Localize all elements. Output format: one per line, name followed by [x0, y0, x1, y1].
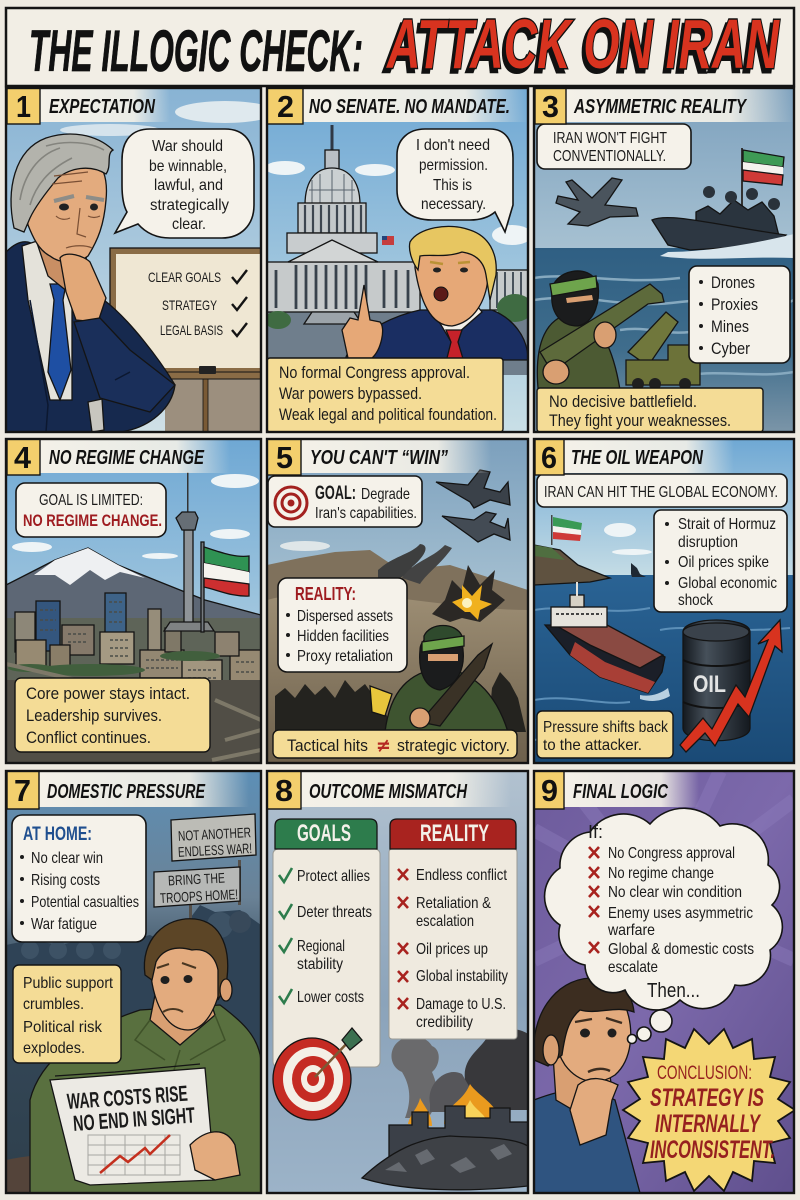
panel 9: final logic — [534, 771, 795, 1193]
header: asymmetric reality: ASYMMETRIC REALITY — [573, 96, 747, 118]
callout: oil risks list: Global economic — [678, 575, 777, 592]
thought cloud: Then... — [647, 980, 700, 1002]
caption: tactical hits: strategic victory. — [397, 736, 510, 755]
callout: oil risks list: shock — [678, 592, 714, 609]
mini chart — [88, 1135, 180, 1175]
callout: at home list: No clear win — [31, 850, 103, 867]
city — [6, 593, 261, 688]
callout: tactics list: Cyber — [711, 339, 750, 358]
boat with soldiers and flag — [652, 148, 794, 259]
callout: tactics list: Mines — [711, 317, 749, 336]
caption: public support crumbles: Public support — [23, 975, 113, 992]
panel 3: asymmetric reality — [534, 88, 794, 432]
callout: Iran won't fight conventionally: CONVENTIONALLY. — [553, 148, 666, 165]
thought cloud: No regime change — [608, 865, 714, 882]
callout: goal with target icon — [268, 476, 422, 527]
caption: no formal approval: No formal Congress approval. — [279, 363, 470, 382]
callout: reality list: Proxy retaliation — [297, 648, 393, 665]
panel 4: no regime change — [6, 439, 261, 763]
Iranian flag — [201, 542, 249, 632]
callout: goal with target icon: Iran's capabilities. — [315, 505, 417, 522]
fighter jets — [436, 470, 510, 542]
header: oil weapon — [535, 439, 734, 475]
panel 1: expectation — [6, 88, 275, 432]
thought cloud: No Congress approval — [608, 845, 735, 862]
thought cloud: No clear win condition — [608, 884, 742, 901]
header: domestic pressure: 7 — [14, 773, 31, 808]
figure: thoughtful man in suit — [6, 134, 175, 432]
smoke trails — [378, 544, 426, 578]
whiteboard: LEGAL BASIS — [160, 322, 223, 338]
callout: reality list: REALITY: — [295, 584, 356, 604]
terrain — [268, 550, 527, 610]
callout: at home list: AT HOME: — [23, 824, 92, 845]
panel 7: domestic pressure — [6, 771, 261, 1193]
header: expectation: 1 — [16, 89, 31, 124]
callout: at home list: Rising costs — [31, 872, 100, 889]
thought cloud: If: — [588, 822, 603, 842]
figure: worried man — [30, 919, 261, 1193]
header: domestic pressure — [7, 771, 249, 809]
goals column: stability — [297, 956, 343, 973]
speech bubble: permission. — [419, 157, 488, 174]
protest signs: NOT ANOTHER — [178, 824, 251, 844]
thought cloud — [545, 808, 782, 1010]
goals column: Regional — [297, 938, 345, 955]
reality column: credibility — [416, 1014, 473, 1031]
panel 8: outcome mismatch — [267, 771, 528, 1193]
speech bubble — [397, 129, 513, 232]
header: you can't win: YOU CAN'T “WIN” — [310, 447, 448, 469]
panel 5: you can't win — [267, 439, 528, 763]
callout: tactics list — [689, 266, 790, 363]
speech bubble: strategically — [150, 197, 229, 214]
speech bubble: necessary. — [421, 196, 486, 213]
caption: public support crumbles — [13, 965, 121, 1063]
protest signs: BRING THE — [168, 869, 225, 888]
militant with rifle — [385, 626, 508, 732]
waves — [534, 276, 794, 375]
thought cloud: warfare — [607, 922, 655, 939]
header: no senate: NO SENATE. NO MANDATE. — [309, 96, 510, 118]
callout: oil risks list: disruption — [678, 534, 738, 551]
hand holding paper — [190, 1132, 240, 1180]
header: domestic pressure: DOMESTIC PRESSURE — [47, 781, 205, 803]
header: you can't win: 5 — [276, 440, 293, 475]
target with arrow — [273, 1028, 362, 1120]
goals column: Protect allies — [297, 868, 370, 885]
callout: at home list: Potential casualties — [31, 894, 139, 911]
goals column: Lower costs — [297, 989, 364, 1006]
speech bubble: I don't need — [416, 137, 490, 154]
header: no senate: 2 — [277, 89, 294, 124]
burning city and rubble — [362, 1029, 528, 1190]
caption: pressure shifts back: Pressure shifts back — [543, 719, 669, 736]
caption: public support crumbles: crumbles. — [23, 996, 84, 1013]
header: outcome mismatch — [267, 771, 511, 809]
Milad tower — [164, 472, 214, 631]
reality column: Retaliation & — [416, 895, 491, 912]
caption: no decisive battlefield: They fight your weaknesses. — [549, 411, 731, 430]
title: The Illogic Check: THE ILLOGIC CHECK: — [29, 19, 363, 84]
header: final logic: 9 — [541, 773, 558, 808]
goals column: Deter threats — [297, 904, 372, 921]
caption: core power intact: Leadership survives. — [26, 706, 162, 725]
yellow flag — [370, 686, 392, 716]
caption: core power intact: Core power stays intact. — [26, 684, 190, 703]
header: no regime change — [7, 439, 230, 475]
thought cloud: Global & domestic costs — [608, 941, 754, 958]
caption: no formal approval — [267, 358, 503, 432]
silhouettes crowd — [275, 680, 395, 732]
header: asymmetric reality: 3 — [542, 89, 559, 124]
header: oil weapon: 6 — [541, 440, 557, 475]
header: no senate — [267, 88, 528, 124]
speech bubble: lawful, and — [154, 177, 223, 194]
callout: oil risks list: Oil prices spike — [678, 554, 769, 571]
title banner — [6, 5, 794, 86]
newspaper: WAR COSTS RISE — [66, 1081, 189, 1114]
mountain — [7, 547, 260, 618]
militant with launcher — [537, 271, 664, 400]
callout: reality list: Hidden facilities — [297, 628, 389, 645]
reality column: REALITY — [420, 820, 489, 847]
speech bubble: This is — [433, 177, 472, 194]
rising red arrow — [680, 620, 782, 752]
whiteboard — [110, 248, 265, 432]
callout: reality list — [278, 578, 407, 672]
header: expectation: EXPECTATION — [49, 96, 155, 118]
caption: no formal approval: War powers bypassed. — [279, 384, 422, 403]
caption: core power intact: Conflict continues. — [26, 728, 151, 747]
goals column — [273, 819, 380, 1067]
speech bubble — [115, 129, 254, 238]
caption: pressure shifts back: to the attacker. — [543, 737, 642, 754]
callout: at home list — [12, 815, 146, 942]
oil barrel — [683, 620, 750, 741]
header: you can't win — [267, 439, 491, 475]
callout: goal is limited — [16, 483, 166, 537]
header: oil weapon: THE OIL WEAPON — [571, 447, 703, 469]
header: outcome mismatch: 8 — [275, 773, 293, 808]
header: no regime change: 4 — [14, 440, 32, 475]
drone — [556, 178, 638, 226]
conclusion starburst — [623, 1029, 795, 1191]
reality column — [389, 819, 517, 1039]
panel 2: no senate no mandate — [265, 88, 533, 432]
icon: target — [275, 487, 307, 519]
figure: speaking man in red tie — [342, 226, 528, 362]
header: expectation — [7, 88, 170, 124]
protest signs: ENDLESS WAR! — [178, 840, 252, 860]
callout: goal with target icon: GOAL: — [315, 483, 356, 504]
caption: tactical hits: Tactical hits — [287, 736, 368, 755]
protest signs: TROOPS HOME! — [160, 886, 238, 906]
protest crowd — [6, 860, 261, 1040]
reality column: escalation — [416, 913, 474, 930]
sea ripples — [534, 608, 790, 742]
figure: pondering man — [534, 978, 640, 1193]
panel 6: the oil weapon — [534, 439, 794, 763]
callout: tactics list: Proxies — [711, 295, 758, 314]
oil tanker — [545, 582, 670, 701]
conclusion starburst: CONCLUSION: — [657, 1063, 752, 1084]
caption: public support crumbles: explodes. — [23, 1040, 85, 1057]
caption: no decisive battlefield — [537, 388, 763, 432]
capitol building — [265, 125, 533, 329]
callout: goal is limited: NO REGIME CHANGE. — [23, 511, 162, 530]
flag on cliff — [534, 515, 610, 585]
thought dots — [628, 1010, 672, 1044]
whiteboard: CLEAR GOALS — [148, 269, 221, 285]
callout: global economy — [537, 474, 787, 507]
whiteboard: STRATEGY — [162, 297, 217, 313]
goals column: GOALS — [297, 820, 351, 847]
header: outcome mismatch: OUTCOME MISMATCH — [309, 781, 467, 803]
callout: tactics list: Drones — [711, 273, 755, 292]
newspaper — [50, 1064, 215, 1185]
newspaper: NO END IN SIGHT — [72, 1102, 196, 1136]
callout: goal with target icon: Degrade — [361, 486, 410, 503]
callout: at home list: War fatigue — [31, 916, 97, 933]
caption: no formal approval: Weak legal and political foundation. — [279, 405, 497, 424]
missile truck — [626, 312, 700, 390]
caption: public support crumbles: Political risk — [23, 1019, 103, 1036]
caption: tactical hits: ≠ — [376, 733, 391, 757]
caption: tactical hits — [273, 730, 517, 758]
callout: oil risks list: Strait of Hormuz — [678, 516, 776, 533]
callout: goal is limited: GOAL IS LIMITED: — [39, 492, 143, 509]
caption: core power intact — [15, 678, 210, 752]
header: asymmetric reality — [535, 88, 794, 124]
reality column: Global instability — [416, 968, 508, 985]
protest signs — [154, 814, 256, 907]
callout: oil risks list — [654, 510, 787, 612]
speech bubble: clear. — [172, 216, 206, 233]
callout: Iran won't fight conventionally: IRAN WON'T FIGHT — [553, 130, 667, 147]
header: final logic — [534, 771, 699, 809]
caption: no decisive battlefield: No decisive battlefield. — [549, 392, 697, 411]
header: no regime change: NO REGIME CHANGE — [49, 447, 204, 469]
reality column: Endless conflict — [416, 867, 507, 884]
thought cloud: Enemy uses asymmetric — [608, 905, 753, 922]
reality column: Oil prices up — [416, 941, 488, 958]
oil barrel: OIL — [693, 671, 726, 698]
thought cloud: escalate — [608, 959, 658, 976]
speech bubble: be winnable, — [149, 158, 227, 175]
callout: Iran won't fight conventionally — [537, 124, 691, 169]
speech bubble: War should — [152, 138, 223, 155]
caption: pressure shifts back — [537, 711, 673, 758]
reality column: Damage to U.S. — [416, 996, 506, 1013]
header: final logic: FINAL LOGIC — [573, 781, 668, 803]
callout: reality list: Dispersed assets — [297, 608, 393, 625]
explosion — [432, 565, 505, 622]
